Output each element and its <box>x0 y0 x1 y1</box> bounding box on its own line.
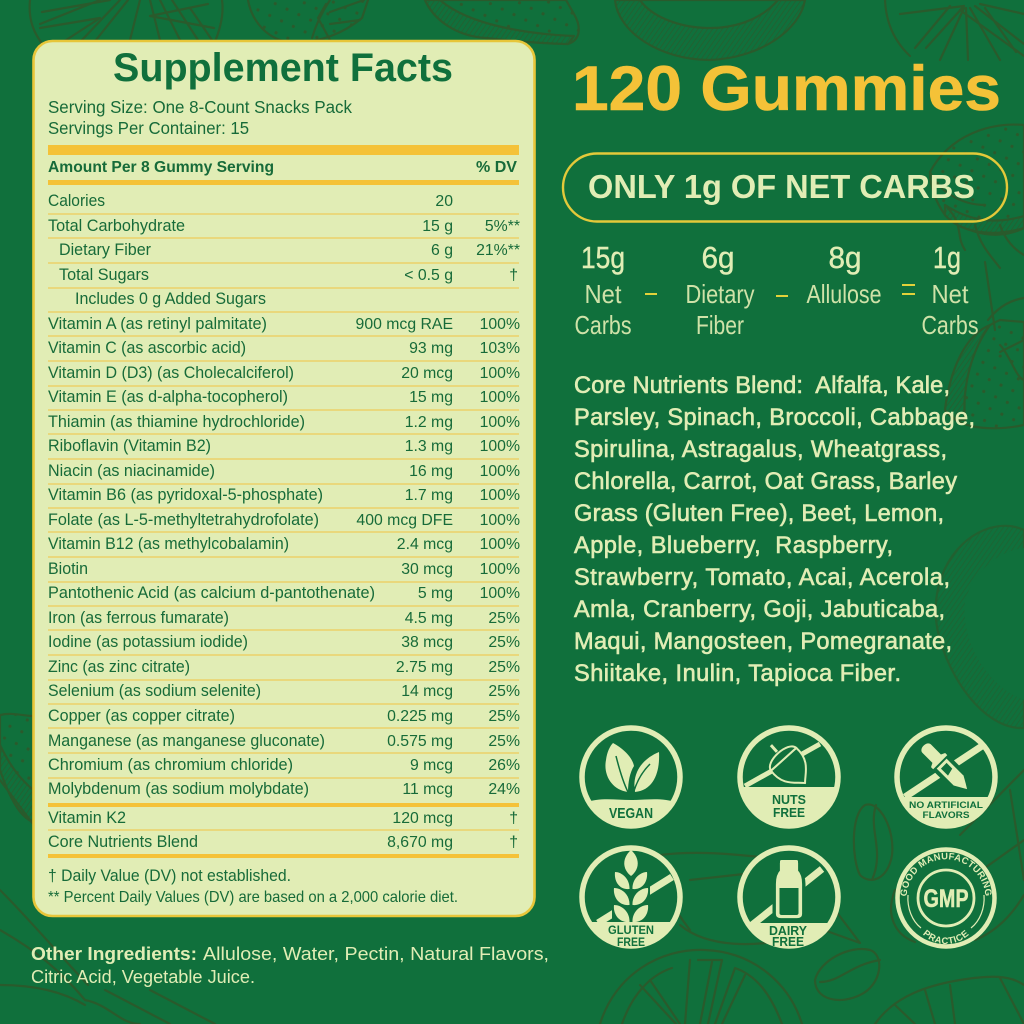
term: 8g allulose: Allulose <box>806 279 882 309</box>
core nutrients blend text: Strawberry, Tomato, Acai, Acerola, <box>574 565 950 591</box>
row: Vitamin B12 <box>48 535 520 553</box>
row: Niacin: 100% <box>480 463 520 480</box>
table header: Amount Per 8 Gummy Serving <box>48 159 274 176</box>
row: Vitamin K2: Vitamin K2 <box>48 809 126 827</box>
icon: GMP badge: PRACTICE <box>923 930 969 944</box>
term: 6g dietary fiber <box>686 240 754 340</box>
row: Copper: 0.225 mg <box>387 708 453 725</box>
icon: dairy free badge: FREE <box>772 935 804 949</box>
term: 1g net carbs: Carbs <box>922 310 978 340</box>
row: Biotin <box>48 560 520 578</box>
row: Dietary Fiber: 21%** <box>476 242 520 259</box>
row: Copper <box>48 707 520 725</box>
term: 15g net carbs: Net <box>584 279 622 309</box>
icon: no artificial flavors badge: NO ARTIFICIAL <box>909 800 983 811</box>
icon: gluten free badge <box>577 848 685 952</box>
operator: minus <box>776 295 788 297</box>
row: Vitamin D: 100% <box>480 365 520 382</box>
core nutrients blend text: Apple, Blueberry, Raspberry, <box>574 533 893 559</box>
icon: no artificial flavors badge: FLAVORS <box>922 810 970 821</box>
row: Vitamin D: 20 mcg <box>401 365 453 382</box>
row: Copper: 25% <box>488 708 520 725</box>
row: Total Sugars: Total Sugars <box>59 266 149 284</box>
row: Biotin: Biotin <box>48 560 88 578</box>
row: Vitamin B12: 2.4 mcg <box>397 536 453 553</box>
row: Riboflavin: 100% <box>480 438 520 455</box>
icon: gluten free badge: FREE <box>617 935 645 949</box>
row: Vitamin E: 15 mg <box>409 389 453 406</box>
row: Copper: Copper (as copper citrate) <box>48 707 235 725</box>
term: 6g dietary fiber: 6g <box>702 240 734 275</box>
row: Core Nutrients Blend: 8,670 mg <box>387 834 453 851</box>
row: Dietary Fiber: 6 g <box>431 242 453 259</box>
footnotes <box>48 867 458 906</box>
icon: nuts free badge: NUTS <box>772 792 806 807</box>
serving info: Servings Per Container: 15 <box>48 118 249 138</box>
row: Vitamin B6: 1.7 mg <box>405 487 453 504</box>
row: Vitamin K2 <box>48 809 518 827</box>
row: Vitamin D <box>48 364 520 382</box>
row: Vitamin E <box>48 388 520 406</box>
row: Calories: Calories <box>48 192 105 210</box>
row: Core Nutrients Blend <box>48 833 518 851</box>
term: 8g allulose <box>806 240 882 309</box>
row: Biotin: 30 mcg <box>401 561 453 578</box>
row: Niacin: 16 mg <box>409 463 453 480</box>
row: Iodine: 25% <box>488 634 520 651</box>
row: Vitamin B6: Vitamin B6 (as pyridoxal-5-phosphate) <box>48 486 323 504</box>
term: 15g net carbs <box>574 240 632 340</box>
term: 15g net carbs: 15g <box>581 240 625 275</box>
operator: minus <box>645 293 657 295</box>
icon: GMP badge: GMP <box>924 885 968 913</box>
row: Total Carbohydrate: Total Carbohydrate <box>48 217 185 235</box>
row: Vitamin C: 93 mg <box>409 340 453 357</box>
title: 120 Gummies: 120 Gummies <box>572 54 1001 124</box>
core nutrients blend text: Spirulina, Astragalus, Wheatgrass, <box>574 437 947 463</box>
icon: dairy free badge: DAIRY <box>769 924 808 938</box>
icon: dairy free badge <box>735 848 843 953</box>
row: Riboflavin: 1.3 mg <box>405 438 453 455</box>
panel: supplement facts <box>34 41 534 916</box>
row: Iodine <box>48 633 520 651</box>
row: Vitamin E: Vitamin E (as d-alpha-tocopherol) <box>48 388 288 406</box>
row: Dietary Fiber: Dietary Fiber <box>59 241 152 259</box>
term: 8g allulose: 8g <box>828 240 862 275</box>
icon: nuts free badge: FREE <box>773 805 805 820</box>
row: Folate <box>48 511 520 529</box>
icon: nuts free badge <box>735 728 843 832</box>
row: Chromium: 9 mcg <box>410 757 453 774</box>
row: Molybdenum: Molybdenum (as sodium molybdate) <box>48 780 309 798</box>
row: Manganese: 0.575 mg <box>387 733 453 750</box>
row: Folate: 100% <box>480 512 520 529</box>
serving info <box>48 97 352 138</box>
other ingredients: Citric Acid, Vegetable Juice. <box>31 966 255 987</box>
core nutrients blend text: Maqui, Mangosteen, Pomegranate, <box>574 629 952 655</box>
row: Folate: Folate (as L-5-methyltetrahydrofolate) <box>48 511 319 529</box>
heading: Supplement Facts: Supplement Facts <box>113 46 453 90</box>
row: Vitamin A: Vitamin A (as retinyl palmitate) <box>48 315 267 333</box>
net carbs equation <box>574 240 978 340</box>
icon: GMP badge <box>895 847 997 949</box>
row: Riboflavin <box>48 437 520 455</box>
row: Niacin: Niacin (as niacinamide) <box>48 462 215 480</box>
row: Selenium <box>48 682 520 700</box>
row: Core Nutrients Blend: † <box>509 834 518 851</box>
row: Vitamin A: 900 mcg RAE <box>356 316 453 333</box>
row: Vitamin B12: 100% <box>480 536 520 553</box>
row: Thiamin: 100% <box>480 414 520 431</box>
row: Vitamin E: 100% <box>480 389 520 406</box>
icon: vegan badge <box>582 728 680 830</box>
row: Manganese: Manganese (as manganese gluconate) <box>48 732 325 750</box>
core nutrients blend text: Chlorella, Carrot, Oat Grass, Barley <box>574 469 957 495</box>
row: Chromium: Chromium (as chromium chloride) <box>48 756 293 774</box>
row: Pantothenic Acid <box>48 584 520 602</box>
row: Manganese <box>48 732 520 750</box>
row: Pantothenic Acid: 5 mg <box>418 585 453 602</box>
core nutrients blend text: Amla, Cranberry, Goji, Jabuticaba, <box>574 597 945 623</box>
callout: only 1g of net carbs <box>563 154 1007 222</box>
row: Total Carbohydrate: 5%** <box>485 218 520 235</box>
core nutrients blend text: Shiitake, Inulin, Tapioca Fiber. <box>574 661 901 687</box>
other ingredients: Allulose, Water, Pectin, Natural Flavors, <box>203 943 549 964</box>
row: Iron: Iron (as ferrous fumarate) <box>48 609 229 627</box>
term: 1g net carbs: Net <box>932 279 969 309</box>
row: Iron <box>48 609 520 627</box>
row: Selenium: 25% <box>488 683 520 700</box>
row: Added Sugars: Includes 0 g Added Sugars <box>75 290 266 308</box>
row: Selenium: 14 mcg <box>401 683 453 700</box>
table header: % DV <box>476 159 517 176</box>
row: Thiamin: 1.2 mg <box>405 414 453 431</box>
row: Thiamin: Thiamin (as thiamine hydrochloride) <box>48 413 305 431</box>
term: 15g net carbs: Carbs <box>574 310 632 340</box>
table header <box>48 159 517 176</box>
row: Zinc: 2.75 mg <box>396 659 453 676</box>
row: Vitamin B6 <box>48 486 520 504</box>
row: Selenium: Selenium (as sodium selenite) <box>48 682 261 700</box>
core nutrients blend text <box>574 373 975 687</box>
core nutrients blend text: Core Nutrients Blend: Alfalfa, Kale, <box>574 373 950 399</box>
row: Vitamin A: 100% <box>480 316 520 333</box>
row: Molybdenum <box>48 780 520 798</box>
row: Manganese: 25% <box>488 733 520 750</box>
callout: only 1g of net carbs: ONLY 1g OF NET CARBS <box>588 168 975 205</box>
row: Total Sugars <box>59 266 518 284</box>
row: Calories <box>48 192 453 210</box>
row: Vitamin C: Vitamin C (as ascorbic acid) <box>48 339 246 357</box>
core nutrients blend text: Parsley, Spinach, Broccoli, Cabbage, <box>574 405 975 431</box>
row: Thiamin <box>48 413 520 431</box>
row: Vitamin C <box>48 339 520 357</box>
row: Zinc <box>48 658 520 676</box>
row: Zinc: Zinc (as zinc citrate) <box>48 658 190 676</box>
other ingredients <box>31 943 549 987</box>
row: Iron: 25% <box>488 610 520 627</box>
row: Vitamin D: Vitamin D (D3) (as Cholecalciferol) <box>48 364 294 382</box>
term: 6g dietary fiber: Fiber <box>696 310 744 340</box>
term: 1g net carbs <box>922 240 978 340</box>
row: Total Sugars: † <box>509 267 518 284</box>
row: Pantothenic Acid: 100% <box>480 585 520 602</box>
row: Vitamin B6: 100% <box>480 487 520 504</box>
row: Biotin: 100% <box>480 561 520 578</box>
row: Iodine: 38 mcg <box>401 634 453 651</box>
icon: GMP badge: GOOD MANUFACTURING <box>900 852 992 896</box>
row: Riboflavin: Riboflavin (Vitamin B2) <box>48 437 211 455</box>
row: Molybdenum: 11 mcg <box>402 781 453 798</box>
icon: vegan badge: VEGAN <box>609 805 653 822</box>
operator: equals <box>902 284 915 295</box>
row: Calories: 20 <box>435 193 453 210</box>
row: Molybdenum: 24% <box>488 781 520 798</box>
row: Vitamin B12: Vitamin B12 (as methylcobalamin) <box>48 535 289 553</box>
icon: gluten free badge: GLUTEN <box>608 923 654 937</box>
row: Vitamin K2: † <box>509 810 518 827</box>
footnotes: † Daily Value (DV) not established. <box>48 867 291 885</box>
term: 1g net carbs: 1g <box>933 240 961 275</box>
row: Vitamin C: 103% <box>480 340 520 357</box>
row: Total Carbohydrate: 15 g <box>422 218 453 235</box>
core nutrients blend text: Grass (Gluten Free), Beet, Lemon, <box>574 501 944 527</box>
other ingredients: Other Ingredients: <box>31 943 197 964</box>
row: Vitamin K2: 120 mcg <box>392 810 453 827</box>
row: Zinc: 25% <box>488 659 520 676</box>
row: Vitamin A <box>48 315 520 333</box>
row: Folate: 400 mcg DFE <box>356 512 453 529</box>
row: Chromium: 26% <box>488 757 520 774</box>
row: Iron: 4.5 mg <box>405 610 453 627</box>
row: Total Carbohydrate <box>48 217 520 235</box>
serving info: Serving Size: One 8-Count Snacks Pack <box>48 97 352 117</box>
row: Iodine: Iodine (as potassium iodide) <box>48 633 248 651</box>
row: Chromium <box>48 756 520 774</box>
term: 6g dietary fiber: Dietary <box>686 279 754 309</box>
icon: no artificial flavors badge <box>892 728 1000 832</box>
row: Dietary Fiber <box>59 241 520 259</box>
footnotes: ** Percent Daily Values (DV) are based on a 2,000 calorie diet. <box>48 889 458 906</box>
row: Total Sugars: < 0.5 g <box>404 267 453 284</box>
row: Niacin <box>48 462 520 480</box>
row: Core Nutrients Blend: Core Nutrients Blend <box>48 833 198 851</box>
row: Pantothenic Acid: Pantothenic Acid (as calcium d-pantothenate) <box>48 584 375 602</box>
